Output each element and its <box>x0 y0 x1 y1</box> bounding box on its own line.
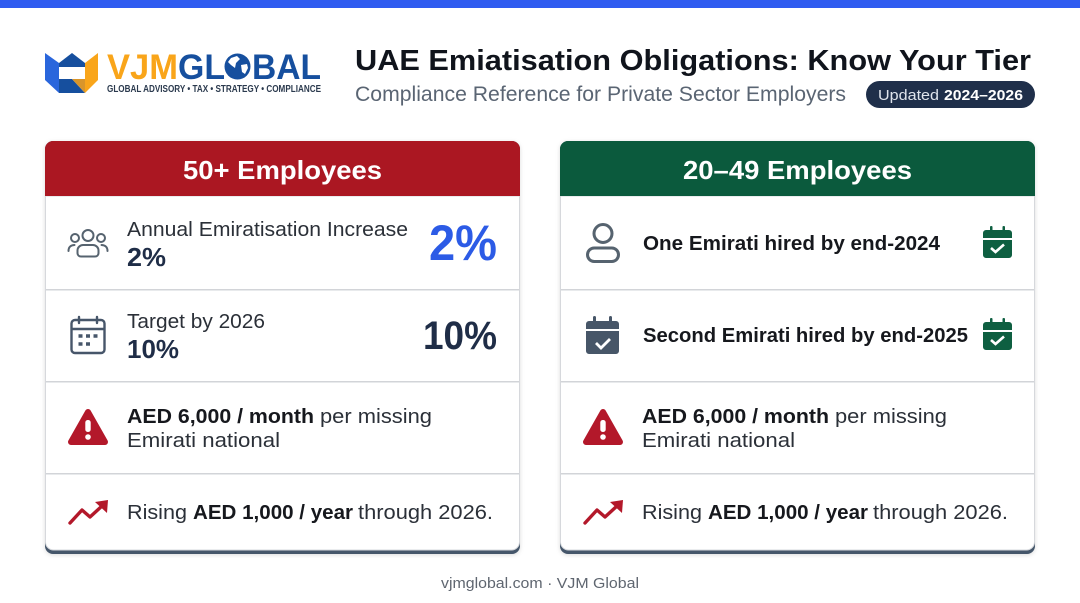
icon: dark calendar check <box>586 316 619 354</box>
row: rising: through 2026. <box>358 502 493 524</box>
text: one Emirati: One Emirati hired by end-2024 <box>643 233 941 255</box>
footer: vjmglobal.com · VJM Global <box>441 575 639 592</box>
badge: updated: 2024–2026 <box>944 87 1023 104</box>
row: annual increase: 2% <box>127 242 166 272</box>
row: fine <box>127 406 432 452</box>
big figure: 2%: 2% <box>429 215 497 271</box>
subtitle: Compliance Reference for Private Sector Employers <box>355 83 846 106</box>
panel header: 20–49 Employees <box>683 155 912 185</box>
badge: updated <box>866 81 1035 108</box>
row: target by 2026: 10% <box>127 334 179 364</box>
logo: VJM Global: GL <box>178 48 225 87</box>
panel: 20-49 employees <box>560 141 1035 554</box>
icon: rising arrow <box>70 500 108 523</box>
panel header <box>45 141 520 196</box>
row: target by 2026 <box>127 311 265 364</box>
row: target by 2026: Target by 2026 <box>127 311 265 333</box>
title: UAE Emiatisation Obligations: Know Your Tier <box>355 45 1031 77</box>
icon: warning <box>71 412 105 442</box>
logo: VJM Global: BAL <box>252 48 321 87</box>
panel header <box>560 141 1035 196</box>
icon: calendar <box>72 317 104 353</box>
icon: person <box>588 224 618 262</box>
icon: rising arrow <box>585 500 623 523</box>
icon: warning <box>586 412 620 442</box>
logo: VJM Global: VJM <box>107 48 178 87</box>
row: fine <box>642 406 947 452</box>
icon: group of people <box>68 230 108 256</box>
text: second Emirati: Second Emirati hired by end-2025 <box>643 325 968 347</box>
badge: updated: Updated <box>878 87 939 104</box>
row: fine: Emirati national <box>127 430 280 452</box>
row: annual increase: Annual Emiratisation Increase <box>127 219 408 241</box>
icon: green calendar check <box>983 318 1012 350</box>
row: rising: AED 1,000 / year <box>193 502 353 524</box>
row: rising: AED 1,000 / year <box>708 502 868 524</box>
row: fine: AED 6,000 / month <box>127 406 314 428</box>
row: rising <box>642 502 1008 524</box>
panel: 50+ employees <box>45 141 520 554</box>
logo: VJM Global <box>45 48 321 95</box>
row: fine: Emirati national <box>642 430 795 452</box>
top accent bar <box>0 0 1080 8</box>
big figure: 10%: 10% <box>423 314 497 358</box>
row: rising: Rising <box>642 502 702 524</box>
row: fine: per missing <box>320 406 432 428</box>
row: rising: through 2026. <box>873 502 1008 524</box>
icon: green calendar check <box>983 226 1012 258</box>
row: fine: AED 6,000 / month <box>642 406 829 428</box>
row: fine: per missing <box>835 406 947 428</box>
row: rising <box>127 502 493 524</box>
logo: VJM Global: GLOBAL ADVISORY • TAX • STRATEGY • COMPLIANCE <box>107 84 321 95</box>
row: rising: Rising <box>127 502 187 524</box>
panel header: 50+ Employees <box>183 155 382 185</box>
row: annual increase <box>127 219 408 272</box>
